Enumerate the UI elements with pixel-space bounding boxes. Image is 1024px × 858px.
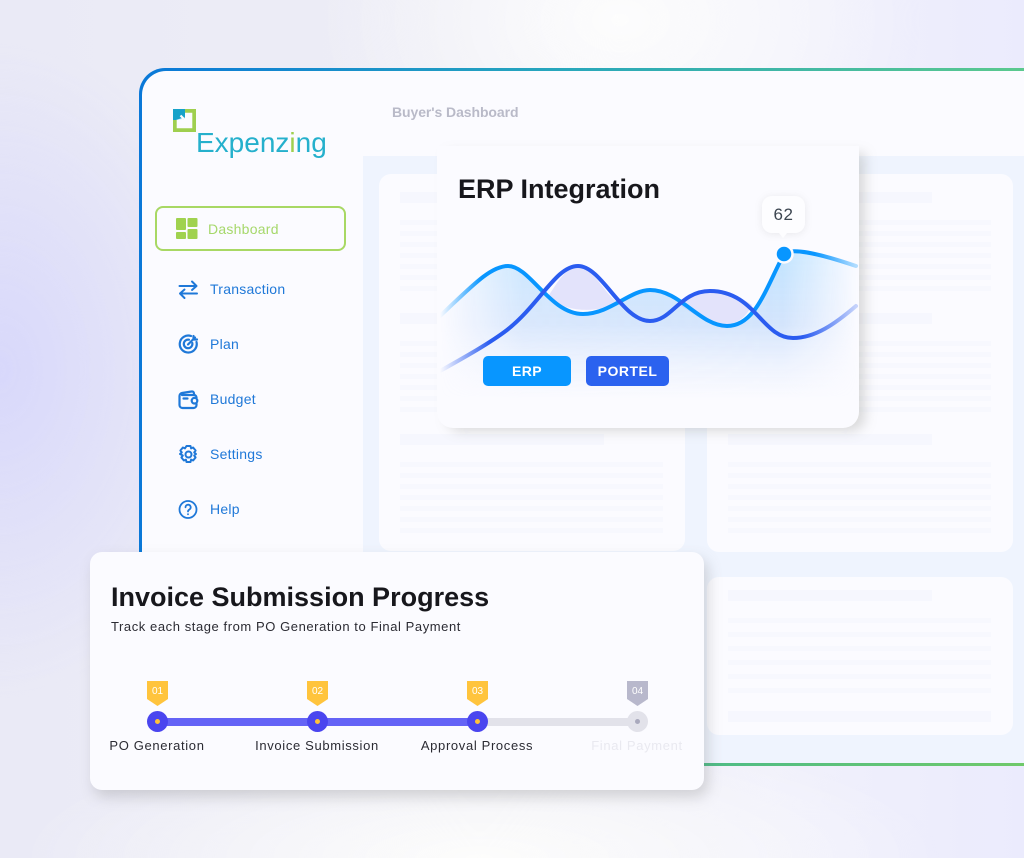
tooltip: value 62: [762, 196, 805, 233]
label: Budget: Budget: [210, 391, 256, 407]
tooltip: value 62: 62: [773, 205, 794, 224]
step label: PO Generation: PO Generation: [109, 738, 205, 753]
step label: Invoice Submission: Invoice Submission: [255, 738, 379, 753]
tooltip pointer: [779, 233, 787, 238]
heading: Buyer's Dashboard: Buyer's Dashboard: [392, 104, 518, 120]
background below window: [0, 765, 1024, 767]
card: background left: [379, 174, 685, 551]
icon: settings gear: [179, 445, 197, 463]
label: Help: Help: [210, 501, 240, 517]
subheading: Track each stage from PO Generation to Final Payment: [111, 619, 461, 634]
tag 03: 03: [472, 686, 483, 697]
legend: PORTEL: [586, 356, 669, 386]
tag 03: [467, 681, 488, 706]
step label: Final Payment: Final Payment: [591, 738, 683, 753]
series: PORTEL: [440, 266, 856, 371]
legend: ERP: ERP: [512, 363, 542, 379]
nav item: Dashboard (active): [155, 206, 346, 251]
panel: main dashboard window: [139, 68, 1024, 766]
label: Settings: Settings: [210, 446, 263, 462]
heading: Invoice Submission Progress: Invoice Submission Progress: [111, 582, 489, 612]
line chart: ERP vs Portel: [441, 246, 858, 378]
icon: logo mark: [173, 109, 196, 132]
step label: Approval Process: Approval Process: [421, 738, 533, 753]
step 1 marker: [147, 711, 168, 732]
card: background right: [707, 174, 1013, 552]
tag 04: 04: [632, 686, 643, 697]
step 3 marker: [467, 711, 488, 732]
chart area fill: [458, 253, 846, 378]
icon: plan target: [178, 334, 198, 354]
icon: budget wallet: [178, 390, 198, 410]
icon: help circle: [178, 500, 198, 519]
step 4 marker: [627, 711, 648, 732]
heading: ERP Integration: ERP Integration: [458, 174, 660, 204]
progress track: completed: [157, 718, 477, 726]
label: Plan: Plan: [210, 336, 239, 352]
area between series: [547, 266, 752, 324]
tag 01: [147, 681, 168, 706]
card: background lower right: [707, 577, 1013, 735]
icon: dashboard grid: [176, 218, 198, 239]
tag 04: [627, 681, 648, 706]
window bottom border: [500, 763, 1024, 766]
tag 02: [307, 681, 328, 706]
tag 01: 01: [152, 686, 163, 697]
panel: ERP Integration card: [437, 146, 859, 428]
label: Dashboard: Dashboard: [208, 221, 279, 237]
step 2 marker: [307, 711, 328, 732]
progress track: remaining: [477, 718, 637, 726]
logo wordmark: Expenzing: [196, 127, 327, 158]
panel: dashboard content area: [363, 156, 1024, 764]
icon: transaction arrows: [178, 280, 198, 299]
series: ERP: [440, 251, 856, 326]
tag 02: 02: [312, 686, 323, 697]
panel: Invoice Submission Progress card: [90, 552, 704, 790]
label: Transaction: Transaction: [210, 281, 285, 297]
logo: Expenzing: [173, 109, 327, 158]
legend: PORTEL: PORTEL: [598, 363, 657, 379]
legend: ERP: [483, 356, 571, 386]
marker: 62 data point: [776, 246, 792, 262]
